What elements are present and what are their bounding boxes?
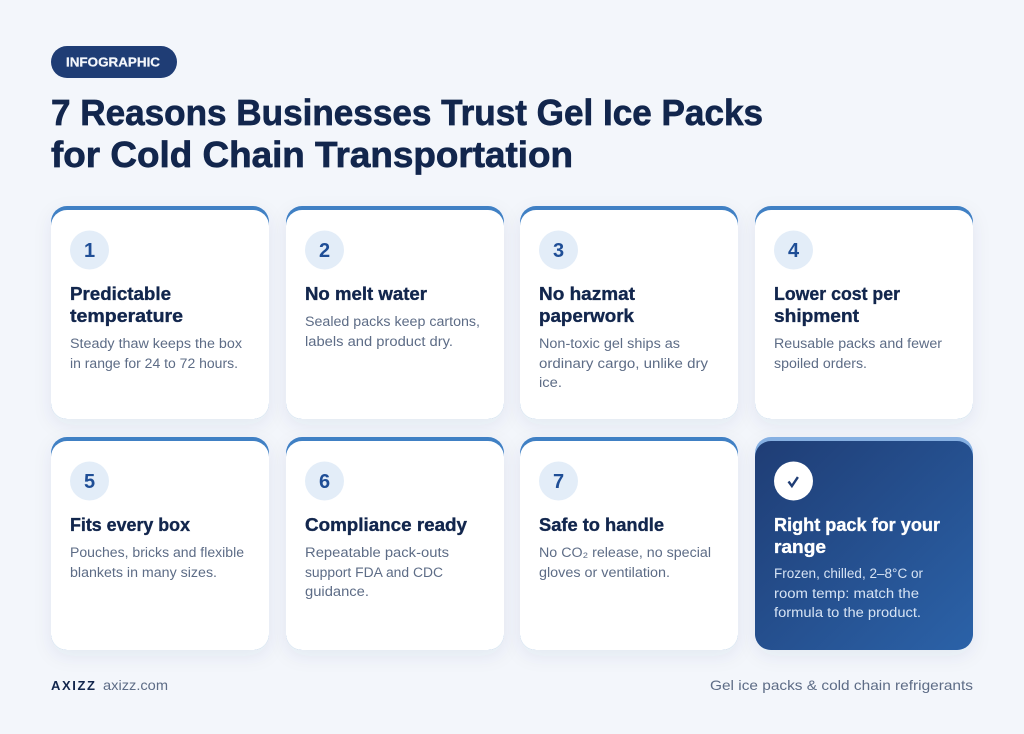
- panel: card 3: [520, 206, 738, 419]
- text: card 6 body: [305, 545, 449, 599]
- heading: compliance ready: Compliance ready: [305, 515, 467, 535]
- heading: lower cost per shipment: Lower cost per: [774, 284, 900, 304]
- icon: check mark: [774, 462, 813, 500]
- badge: number 6: [305, 462, 344, 500]
- text: card 2 body: [305, 314, 480, 349]
- badge: number 2: 2: [319, 240, 330, 262]
- badge: number 4: 4: [788, 240, 800, 262]
- text: card 3 body: ice.: [539, 375, 562, 390]
- tag: infographic: [51, 46, 177, 78]
- text: card 6 body: guidance.: [305, 584, 369, 599]
- text: card 5 body: blankets in many sizes.: [70, 565, 217, 580]
- text: highlighted card body: formula to the product.: [774, 605, 921, 620]
- heading: no hazmat paperwork: paperwork: [539, 306, 635, 326]
- heading: lower cost per shipment: [774, 284, 900, 326]
- text: highlighted card body: room temp: match the: [774, 586, 919, 601]
- heading: no melt water: No melt water: [305, 284, 427, 304]
- badge: number 3: [539, 230, 578, 270]
- footer: brand: AXIZZ: [51, 678, 95, 693]
- panel: card 1: [51, 206, 269, 419]
- heading: no hazmat paperwork: [539, 284, 635, 326]
- heading: fits every box: Fits every box: [70, 515, 190, 535]
- text: card 1 body: in range for 24 to 72 hours.: [70, 356, 238, 371]
- panel: card 5: [51, 437, 269, 650]
- text: card 1 body: Steady thaw keeps the box: [70, 336, 242, 351]
- badge: number 2: [305, 230, 344, 270]
- badge: number 1: [70, 230, 109, 270]
- text: card 7 body: gloves or ventilation.: [539, 565, 670, 580]
- panel: card 4: [755, 206, 973, 419]
- text: card 7 body: [539, 545, 711, 580]
- badge: number 6: 6: [319, 471, 330, 493]
- badge: number 5: 5: [84, 471, 95, 493]
- text: card 3 body: ordinary cargo, unlike dry: [539, 356, 708, 371]
- panel: highlighted card: [755, 437, 973, 650]
- tag: infographic: INFOGRAPHIC: [66, 54, 161, 70]
- text: card 4 body: spoiled orders.: [774, 356, 867, 371]
- title: for Cold Chain Transportation: [51, 134, 573, 175]
- text: card 6 body: Repeatable pack-outs: [305, 545, 449, 560]
- text: card 5 body: Pouches, bricks and flexible: [70, 545, 244, 560]
- footer: brand: [51, 677, 168, 693]
- text: card 1 body: [70, 336, 242, 371]
- heading: safe to handle: Safe to handle: [539, 515, 664, 535]
- badge: number 1: 1: [84, 240, 95, 262]
- text: card 2 body: Sealed packs keep cartons,: [305, 314, 480, 329]
- text: card 6 body: support FDA and CDC: [305, 565, 443, 580]
- text: card 3 body: Non-toxic gel ships as: [539, 336, 680, 351]
- badge: number 5: [70, 462, 109, 500]
- heading: lower cost per shipment: shipment: [774, 306, 859, 326]
- text: card 4 body: Reusable packs and fewer: [774, 336, 943, 351]
- footer: tagline: Gel ice packs & cold chain refrigerants: [710, 677, 973, 693]
- heading: no hazmat paperwork: No hazmat: [539, 284, 635, 304]
- text: highlighted card body: [774, 566, 924, 620]
- title: 7 Reasons Businesses Trust Gel Ice Packs: [51, 92, 763, 133]
- text: card 3 body: [539, 336, 708, 390]
- badge: number 3: 3: [553, 240, 564, 262]
- heading: predictable temperature: Predictable: [70, 284, 171, 304]
- title: [51, 92, 763, 175]
- panel: card 7: [520, 437, 738, 650]
- badge: number 7: [539, 462, 578, 500]
- heading: right pack for your range: [774, 515, 940, 557]
- text: card 5 body: [70, 545, 244, 580]
- text: card 2 body: labels and product dry.: [305, 334, 453, 349]
- heading: right pack for your range: range: [774, 537, 826, 557]
- heading: predictable temperature: temperature: [70, 306, 183, 326]
- text: card 4 body: [774, 336, 943, 371]
- panel: card 6: [286, 437, 504, 650]
- text: card 7 body: No CO₂ release, no special: [539, 545, 711, 560]
- heading: predictable temperature: [70, 284, 183, 326]
- heading: right pack for your range: Right pack for your: [774, 515, 940, 535]
- badge: number 4: [774, 230, 813, 270]
- panel: card 2: [286, 206, 504, 419]
- text: highlighted card body: Frozen, chilled, 2–8°C or: [774, 566, 924, 581]
- footer: brand: axizz.com: [103, 677, 168, 693]
- badge: number 7: 7: [553, 471, 564, 493]
